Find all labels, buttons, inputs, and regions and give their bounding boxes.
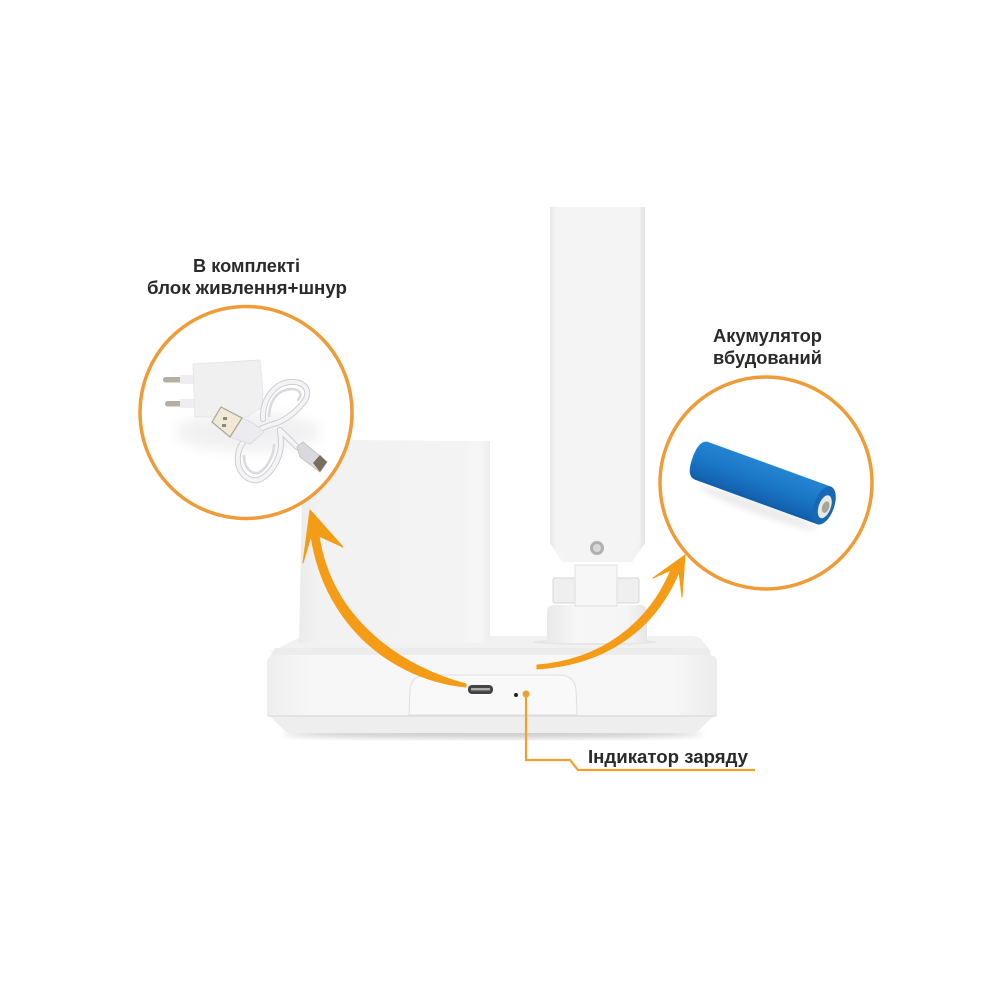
micro USB plug [297,442,327,472]
label: battery: вбудований [713,347,822,368]
USB-A plug [212,407,264,444]
screw [590,541,604,555]
label: charge indicator: Індикатор заряду [588,746,749,767]
label: in the kit: В комплекті [193,255,300,276]
indicator LED [514,693,518,697]
label: battery: Акумулятор [713,325,822,346]
label: in the kit [147,255,347,298]
right circle: battery [660,377,872,589]
label: in the kit: блок живлення+шнур [147,277,347,298]
indicator leader line [522,690,755,770]
battery cell [686,439,840,528]
label: battery [713,325,822,368]
connector panel [409,675,577,715]
left circle: power adapter and cable [140,306,352,518]
lamp arm [550,207,645,562]
base [267,636,717,738]
arrow: base to battery [537,555,685,669]
storage holder [299,440,490,643]
arrow: charging cable to holder [303,510,466,687]
adapter body [193,360,263,417]
plug pins [163,375,194,408]
lamp hinge and stem [533,565,657,645]
cable loops [238,382,307,480]
micro USB port [468,685,493,694]
